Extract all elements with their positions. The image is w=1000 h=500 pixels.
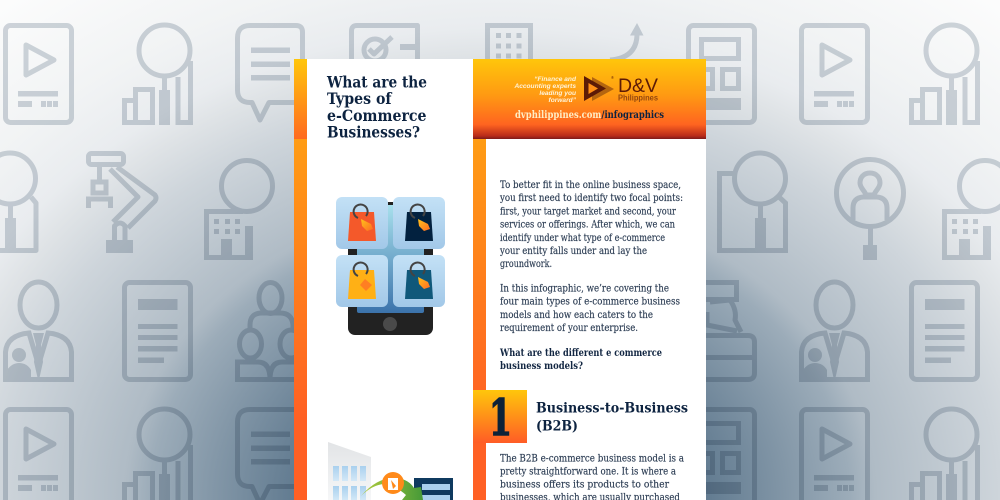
heading: Business-to-Business: Business-to-Business [536, 400, 688, 416]
intro text: services or offerings. After which, we can [500, 220, 676, 231]
heading: Business-to-Business: (B2B) [536, 419, 578, 435]
icon: form layout bottom [688, 410, 754, 500]
icon: form layout [688, 26, 754, 122]
app tile: teal bag [393, 255, 445, 307]
intro text: In this infographic, we’re covering the [500, 284, 669, 294]
icon: magnifier chart bottom right [912, 409, 978, 500]
intro text: your entity falls under and lay the [499, 246, 647, 257]
intro text: you first need to identify two focal points: [499, 193, 683, 204]
icon: rising arrow [610, 23, 644, 60]
intro text: four main types of e-commerce business [500, 297, 680, 308]
title: What are the [326, 72, 427, 92]
app tile: yellow bag [336, 255, 388, 307]
number badge 1 [473, 388, 527, 447]
icon: magnifier over bar chart right [912, 25, 978, 125]
icon: business person right [802, 282, 868, 382]
icon: mentor group [238, 282, 304, 380]
number badge 1: 1 [489, 388, 512, 447]
icon: play document bottom right [802, 410, 868, 500]
app tile: red bag [336, 197, 388, 249]
product badge [382, 472, 404, 494]
icon: magnifier over building right [944, 160, 1000, 260]
seller building [328, 442, 371, 500]
website url: dvphilippines.com/infographics [515, 110, 664, 121]
B2B description text: pretty straightforward one. It is where a [500, 466, 676, 478]
subheading: business models question: What are the different e commerce [499, 348, 662, 359]
tagline: “Finance and [534, 76, 577, 83]
icon: play document [6, 26, 72, 122]
icon: text document right [912, 282, 978, 380]
B2B description text: business offers its products to other [500, 480, 669, 491]
illustration: B2B transfer [328, 442, 453, 500]
panel: infographic sheet [294, 59, 706, 500]
title: Types of [327, 89, 393, 108]
title [326, 72, 427, 142]
tagline: leading you [539, 90, 576, 97]
logo: D&V Philippines: D&V [618, 76, 658, 97]
intro text [499, 180, 683, 334]
title: e-Commerce [327, 106, 427, 125]
icon: speech bubble bottom [238, 410, 302, 500]
icon: stacked desk figure [690, 282, 755, 380]
illustration: shopping app phone [336, 197, 445, 335]
panel: header band [473, 59, 706, 139]
intro text: groundwork. [500, 259, 552, 270]
logo: D&V Philippines [584, 75, 659, 102]
icon: text document [124, 282, 190, 380]
app tile: navy bag [393, 197, 445, 249]
icon: magnifier over bar chart [124, 25, 190, 125]
buyer building [414, 478, 453, 500]
logo: D&V Philippines: ® [611, 75, 614, 80]
logo: D&V Philippines: Philippines [618, 94, 659, 102]
icon: magnifier over document right [720, 153, 786, 253]
heading: Business-to-Business [536, 400, 688, 435]
inner orange strip [473, 139, 486, 500]
icon: speech bubble [238, 26, 302, 120]
intro text: identify under what type of e-commerce [500, 233, 665, 244]
intro text: models and how each caters to the [500, 310, 653, 321]
B2B description text [500, 454, 684, 500]
icon: magnifier over building [206, 160, 272, 260]
tagline: Accounting experts [513, 83, 576, 90]
intro text: requirement of your enterprise. [500, 323, 638, 334]
icon: business person [6, 282, 72, 382]
tagline [513, 76, 577, 104]
icon: magnifier chart bottom left [124, 409, 190, 500]
icon: person in magnifier [836, 160, 904, 260]
tagline: forward” [549, 97, 577, 104]
B2B description text: The B2B e-commerce business model is a [500, 454, 684, 464]
icon: robot arm [88, 154, 156, 253]
subheading: business models question: business models? [500, 361, 583, 372]
icon: checklist [352, 26, 420, 70]
icon: magnifier over document left [0, 153, 36, 253]
subheading: business models question [499, 348, 662, 372]
icon: play document right [802, 26, 868, 122]
title: Businesses? [327, 122, 420, 142]
left orange strip [294, 59, 307, 500]
icon: office building [488, 26, 530, 96]
icon: play document bottom left [6, 410, 72, 500]
intro text: first, your target market and second, your [500, 206, 676, 217]
intro text: To better fit in the online business space, [500, 180, 681, 191]
green arrow [361, 478, 423, 500]
